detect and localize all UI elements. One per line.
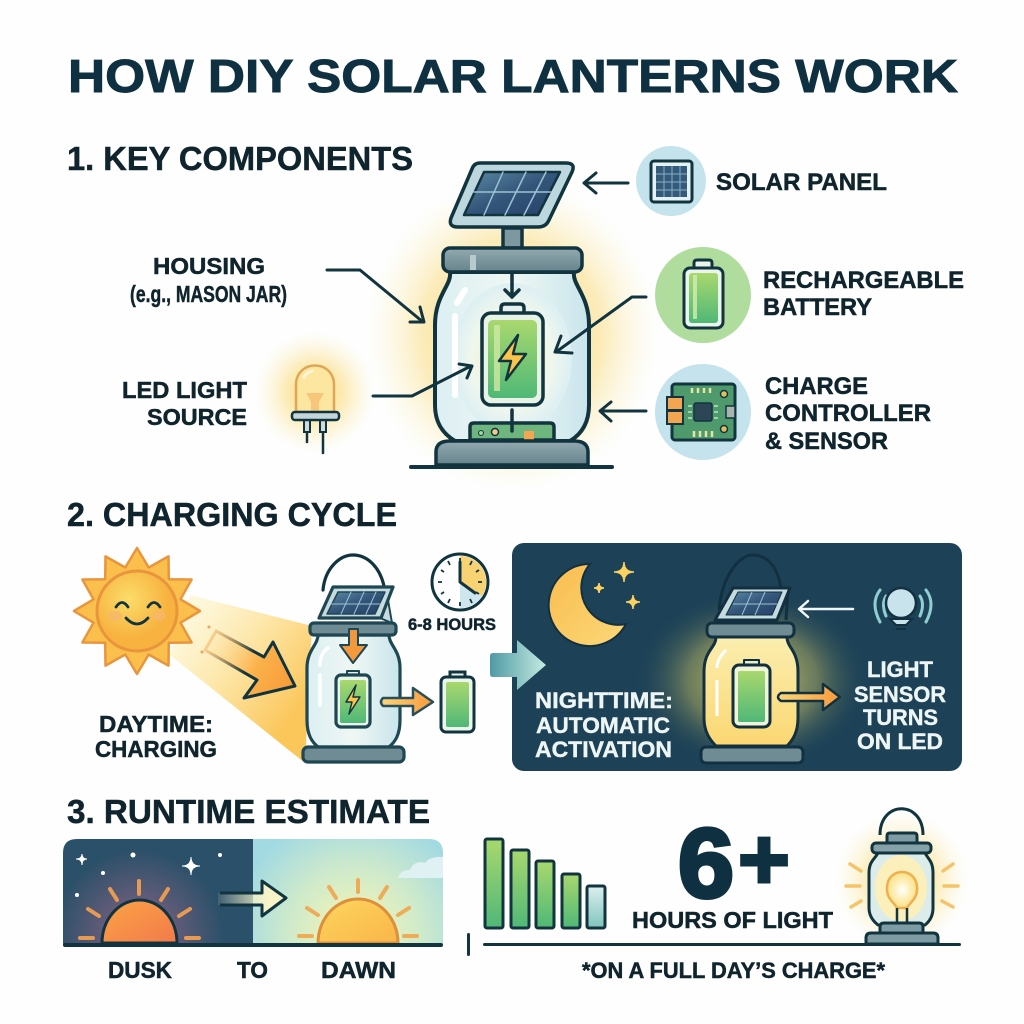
icon: moon <box>549 564 626 646</box>
heading: key components: 1. KEY COMPONENTS <box>67 140 413 177</box>
daytime lantern <box>303 555 404 762</box>
glow behind main jar <box>367 180 657 490</box>
panel <box>380 600 392 623</box>
label: controller <box>765 373 931 455</box>
label: hours of light: HOURS OF LIGHT <box>632 907 833 933</box>
label: hours: 6-8 HOURS <box>408 615 496 634</box>
labels: dusk to dawn <box>108 957 396 983</box>
label: housing <box>130 253 287 307</box>
battery <box>336 671 370 727</box>
label: battery: RECHARGEABLE <box>763 267 964 294</box>
arrow: charge out <box>381 688 433 715</box>
label: LED <box>122 377 247 430</box>
label: LED: LED LIGHT <box>122 377 247 403</box>
circuit board <box>470 410 554 440</box>
label: controller: CHARGE <box>765 373 868 400</box>
arrow: day to night <box>490 640 546 690</box>
inner jar glow <box>452 283 572 433</box>
icon: charge controller <box>655 364 751 460</box>
dawn sky <box>253 839 443 945</box>
label: light sensor: ON LED <box>857 729 943 754</box>
heading: runtime estimate: 3. RUNTIME ESTIMATE <box>67 793 430 830</box>
arrow: sensor to panel <box>799 601 853 617</box>
night glow <box>634 590 870 770</box>
label: light sensor <box>854 657 946 754</box>
arrows: component pointers <box>327 173 646 421</box>
dusk sky <box>63 839 253 945</box>
icon: solar panel <box>636 146 706 216</box>
night lantern <box>701 555 803 763</box>
label: light sensor: SENSOR <box>854 682 946 707</box>
label: nighttime: NIGHTTIME: <box>535 688 673 713</box>
label: controller: CONTROLLER <box>765 400 931 427</box>
icon: glowing lantern <box>836 809 968 948</box>
label: nighttime <box>535 688 673 762</box>
base <box>436 441 588 465</box>
lightning bolt <box>499 335 526 380</box>
horizon <box>63 943 443 947</box>
label: daytime: DAYTIME: <box>99 711 213 737</box>
label: light sensor: TURNS <box>863 705 938 730</box>
cloud <box>398 857 443 878</box>
label: solar panel: SOLAR PANEL <box>716 169 887 196</box>
labels: dusk to dawn: TO <box>237 957 268 983</box>
down arrow <box>340 629 367 663</box>
night stars <box>76 854 200 875</box>
footnote: *ON A FULL DAY’S CHARGE* <box>582 958 885 983</box>
label: light sensor: LIGHT <box>867 657 934 682</box>
solar panel on lantern <box>450 163 573 227</box>
icon: clock <box>432 554 488 610</box>
sun beam <box>170 595 312 763</box>
arrow: battery <box>555 297 646 353</box>
label: daytime: CHARGING <box>95 736 217 762</box>
label: controller: & SENSOR <box>765 428 888 455</box>
jar body <box>435 272 589 441</box>
icon: battery <box>655 247 751 343</box>
arrow: housing <box>327 270 424 322</box>
divider tick <box>467 933 470 956</box>
icon: charged battery <box>441 672 474 732</box>
label: battery <box>763 267 964 321</box>
arrow: controller <box>600 402 646 421</box>
label: housing: (e.g., MASON JAR) <box>130 281 287 307</box>
label: LED: SOURCE <box>147 404 247 430</box>
lid <box>443 248 582 272</box>
panel: nighttime <box>512 543 962 771</box>
label: nighttime: AUTOMATIC <box>536 713 670 738</box>
panel: dusk to dawn <box>63 839 443 947</box>
heading: charging cycle: 2. CHARGING CYCLE <box>67 496 397 533</box>
icon: dusk sun <box>80 881 199 943</box>
labels: dusk to dawn: DUSK <box>108 957 172 983</box>
big number <box>678 808 790 918</box>
arrow: solar panel <box>584 173 628 193</box>
icon: light sensor <box>875 588 931 629</box>
post <box>503 228 522 248</box>
labels: dusk to dawn: DAWN <box>321 957 396 983</box>
main lantern diagram <box>411 163 612 467</box>
big sunlight arrow <box>200 626 295 698</box>
handle <box>323 555 384 590</box>
icon: LED <box>255 332 375 453</box>
icon: smiling sun <box>74 548 200 674</box>
base <box>303 747 404 762</box>
label: housing: HOUSING <box>153 253 265 279</box>
icon: dawn sun <box>299 880 417 943</box>
arrow: LED <box>373 364 472 396</box>
lid <box>310 623 396 635</box>
arrow: dusk to dawn <box>218 881 286 916</box>
label: nighttime: ACTIVATION <box>535 737 672 762</box>
big number: + <box>738 812 790 908</box>
icon: stars <box>594 562 640 609</box>
arrow: to LED <box>778 684 840 710</box>
jar highlights <box>455 290 465 395</box>
label: battery: BATTERY <box>763 294 872 321</box>
baseline <box>483 943 961 946</box>
jar <box>307 635 400 747</box>
big number: 6 <box>678 808 734 918</box>
arrow from panel to battery <box>505 273 519 297</box>
central battery <box>482 304 543 405</box>
bar chart <box>485 839 605 928</box>
title: HOW DIY SOLAR LANTERNS WORK <box>68 50 958 102</box>
label: daytime <box>95 711 217 762</box>
